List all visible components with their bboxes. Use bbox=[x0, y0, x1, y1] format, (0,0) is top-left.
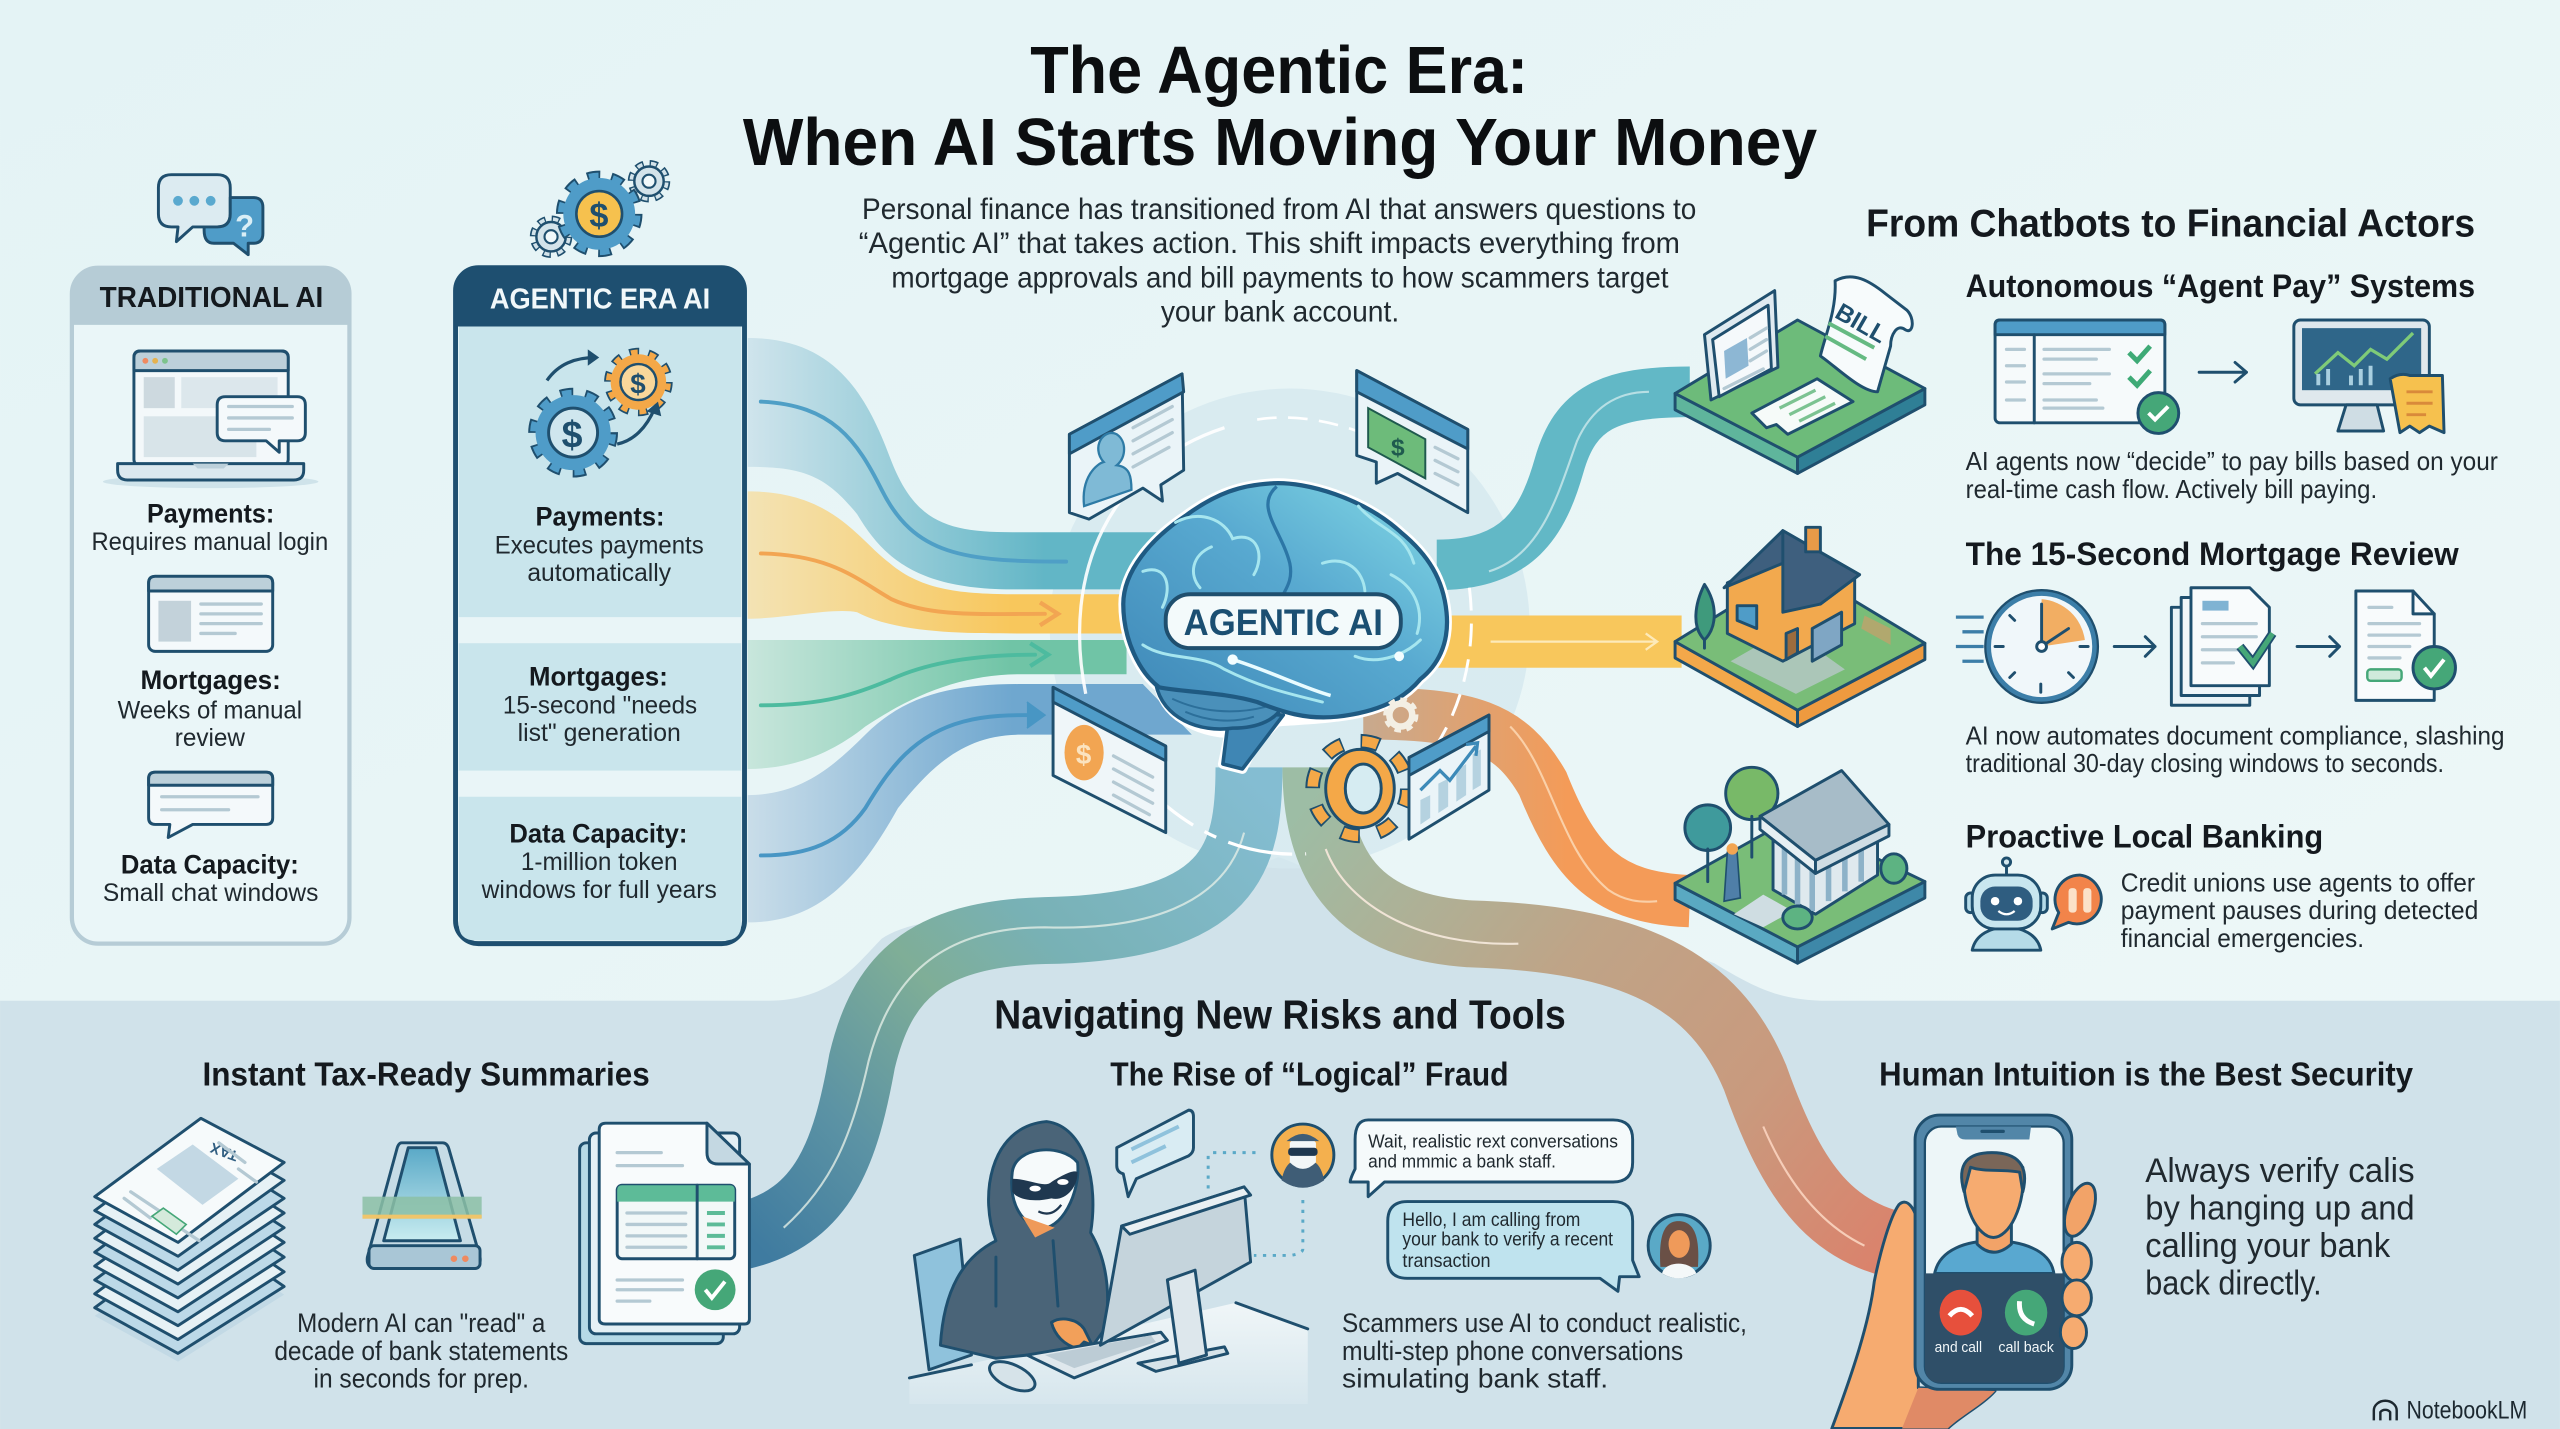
ribbon: left yellow flow bbox=[748, 491, 1135, 633]
agentic mortgages text: Mortgages: bbox=[529, 662, 668, 692]
mortgage description: traditional 30-day closing windows to seconds. bbox=[1966, 748, 2444, 778]
ribbon: right yellow to house platform bbox=[1437, 615, 1682, 668]
tax heading: Instant Tax-Ready Summaries bbox=[202, 1057, 650, 1094]
intuition description: by hanging up and bbox=[2145, 1190, 2415, 1228]
icon: statement stack bbox=[95, 1118, 284, 1362]
panel: agentic era AI bbox=[456, 268, 745, 944]
tax description: Modern AI can "read" a bbox=[297, 1308, 545, 1338]
icon: approved document bbox=[2356, 591, 2455, 700]
ribbon: right orange to bank platform bbox=[1363, 713, 1690, 902]
brain stem bbox=[1223, 712, 1283, 769]
traditional mortgages text: review bbox=[175, 724, 246, 752]
intro paragraph: mortgage approvals and bill payments to how scammers target bbox=[891, 261, 1669, 294]
agentic mortgages text bbox=[503, 662, 697, 747]
section: tax summaries bbox=[95, 1057, 749, 1394]
floating card: money window: $ bbox=[1391, 434, 1405, 461]
traditional data capacity text: Data Capacity: bbox=[121, 849, 299, 879]
AGENTIC AI label pill bbox=[1166, 594, 1401, 648]
avatar: bank caller bbox=[1648, 1215, 1710, 1278]
traditional payments text: Payments: bbox=[147, 498, 274, 528]
icon: summary document bbox=[580, 1123, 749, 1344]
agentic heading: AGENTIC ERA AI bbox=[490, 284, 710, 316]
intro paragraph bbox=[859, 193, 1696, 329]
fraud heading: The Rise of “Logical” Fraud bbox=[1110, 1057, 1509, 1094]
agent pay heading: Autonomous “Agent Pay” Systems bbox=[1966, 267, 2475, 304]
mortgage heading: The 15-Second Mortgage Review bbox=[1966, 535, 2459, 572]
title: The Agentic Era: bbox=[1030, 33, 1528, 108]
chat bubble: scammer message: Wait, realistic rext conversations bbox=[1368, 1131, 1618, 1152]
chat bubble: scammer message bbox=[1350, 1120, 1633, 1197]
icon: pause bubble bbox=[2052, 875, 2101, 929]
floating card: payment dollar: $ bbox=[1076, 739, 1092, 770]
traditional payments text bbox=[91, 498, 328, 556]
banking description: Credit unions use agents to offer bbox=[2121, 867, 2475, 897]
fraud description: simulating bank staff. bbox=[1342, 1364, 1608, 1394]
AGENTIC AI label pill: AGENTIC AI bbox=[1184, 602, 1383, 643]
scene: bank platform bbox=[1675, 767, 1925, 963]
icon: tilted chat bubble bbox=[1117, 1110, 1193, 1197]
tax description: decade of bank statements bbox=[274, 1336, 568, 1366]
section: logical fraud bbox=[909, 1057, 1747, 1404]
agent pay description bbox=[1966, 446, 2498, 504]
floating card: person profile bbox=[1069, 374, 1184, 519]
icon: statement stack: TAX bbox=[208, 1139, 241, 1163]
traditional mortgages text bbox=[118, 665, 302, 752]
floating card: payment dollar bbox=[1053, 687, 1166, 833]
ribbon: down-left to tax summaries bbox=[743, 767, 1249, 1236]
mortgage description: AI now automates document compliance, slashing bbox=[1966, 720, 2504, 750]
banking description: financial emergencies. bbox=[2121, 923, 2364, 953]
intuition description bbox=[2145, 1152, 2415, 1303]
icon: browser window bbox=[149, 576, 273, 651]
avatar: scammer bbox=[1272, 1124, 1334, 1188]
intuition description: calling your bank bbox=[2145, 1227, 2391, 1265]
agentic mortgages text: list" generation bbox=[518, 719, 681, 747]
floating card: money window bbox=[1357, 371, 1468, 513]
icon: laptop with chat bbox=[103, 351, 318, 488]
icon: clock bbox=[1956, 590, 2098, 703]
agent pay description: real-time cash flow. Actively bill paying. bbox=[1966, 474, 2377, 504]
icon: chat bubbles bbox=[158, 175, 263, 255]
fraud description bbox=[1342, 1308, 1747, 1394]
icon: dollar gears: $ bbox=[589, 197, 608, 235]
logo: NotebookLM: NotebookLM bbox=[2406, 1397, 2527, 1425]
icon: document stack bbox=[2171, 588, 2273, 705]
panel: traditional AI bbox=[72, 268, 349, 944]
scene: bill platform bbox=[1675, 277, 1925, 473]
illustration: hand holding phone bbox=[1832, 1115, 2102, 1429]
agentic data capacity text bbox=[481, 818, 717, 904]
icon: robot bbox=[1966, 858, 2047, 950]
section: agent pay bbox=[1966, 267, 2498, 504]
intro paragraph: your bank account. bbox=[1161, 296, 1399, 329]
small white gear bbox=[1385, 700, 1416, 731]
agentic payments text bbox=[495, 502, 704, 587]
arrow bbox=[2297, 637, 2340, 656]
title: When AI Starts Moving Your Money bbox=[743, 105, 1817, 180]
illustration: hooded scammer at computer bbox=[914, 1122, 1108, 1370]
arrow bbox=[2199, 362, 2246, 382]
ribbon: left blue-teal payments flow bbox=[748, 338, 1159, 589]
intuition heading: Human Intuition is the Best Security bbox=[1879, 1057, 2413, 1094]
agentic data capacity text: Data Capacity: bbox=[509, 818, 687, 848]
ribbon: left blue flow bbox=[748, 684, 1192, 922]
orange gear bbox=[1313, 741, 1407, 836]
title bbox=[743, 33, 1817, 180]
icon: scanner bbox=[362, 1143, 482, 1269]
floating card: growth chart bbox=[1409, 715, 1489, 839]
traditional payments text: Requires manual login bbox=[91, 528, 328, 556]
intro paragraph: Personal finance has transitioned from AI that answers questions to bbox=[862, 193, 1696, 226]
intuition description: back directly. bbox=[2145, 1265, 2322, 1303]
traditional data capacity text bbox=[103, 849, 318, 907]
ribbon: left green flow bbox=[748, 640, 1127, 769]
intuition description: Always verify calis bbox=[2145, 1152, 2415, 1190]
section: human intuition bbox=[1832, 1057, 2415, 1429]
illustration: hand holding phone: and call bbox=[1935, 1340, 1982, 1356]
agent pay description: AI agents now “decide” to pay bills based on your bbox=[1966, 446, 2498, 476]
ribbon: right teal to bill platform bbox=[1437, 392, 1690, 571]
lower section band bbox=[0, 857, 2560, 1429]
chat bubble: bank caller message: your bank to verify a recent bbox=[1402, 1229, 1614, 1251]
chat bubble: bank caller message: Hello, I am calling from bbox=[1402, 1209, 1580, 1231]
icon: process gears bbox=[536, 349, 666, 470]
mortgage description bbox=[1966, 720, 2504, 778]
brain: AGENTIC AI bbox=[1123, 483, 1447, 769]
heading: navigating risks: Navigating New Risks and Tools bbox=[994, 992, 1566, 1038]
heading: from chatbots: From Chatbots to Financial Actors bbox=[1866, 203, 2475, 246]
illustration: desk bbox=[909, 1303, 1308, 1404]
scene: house platform bbox=[1675, 527, 1925, 726]
tax description bbox=[274, 1308, 568, 1394]
agentic payments text: automatically bbox=[527, 559, 671, 587]
cerebellum bbox=[1156, 682, 1283, 729]
agentic data capacity text: windows for full years bbox=[481, 876, 717, 904]
scene: bill platform: BILL bbox=[1830, 299, 1891, 349]
agentic data capacity text: 1-million token bbox=[521, 848, 678, 876]
traditional mortgages text: Weeks of manual bbox=[118, 696, 302, 724]
icon: process gears: $ bbox=[630, 368, 646, 399]
illustration: computer monitor bbox=[909, 1187, 1308, 1397]
traditional heading: TRADITIONAL AI bbox=[100, 282, 323, 314]
banking description bbox=[2121, 867, 2478, 953]
fraud description: multi-step phone conversations bbox=[1342, 1336, 1683, 1366]
tax description: in seconds for prep. bbox=[314, 1364, 529, 1394]
icon: dollar gears bbox=[535, 165, 665, 253]
icon: process gears: $ bbox=[562, 413, 583, 455]
intro paragraph: “Agentic AI” that takes action. This shift impacts everything from bbox=[859, 227, 1680, 260]
white orbit ring bbox=[1080, 418, 1471, 854]
agentic payments text: Executes payments bbox=[495, 531, 704, 559]
arrow bbox=[2114, 637, 2155, 656]
banking description: payment pauses during detected bbox=[2121, 895, 2478, 925]
traditional mortgages text: Mortgages: bbox=[140, 665, 281, 695]
dotted connector bbox=[1208, 1153, 1303, 1255]
section: mortgage review bbox=[1956, 535, 2504, 778]
ribbon: down-right to human intuition bbox=[1316, 767, 1935, 1251]
chat bubble: bank caller message bbox=[1388, 1202, 1639, 1291]
icon: monitor chart bbox=[2294, 320, 2444, 433]
section: local banking bbox=[1966, 817, 2478, 953]
illustration: hand holding phone: call back bbox=[1998, 1340, 2054, 1356]
icon: chat bubbles: ? bbox=[235, 209, 254, 244]
icon: small chat window bbox=[149, 772, 273, 838]
agentic mortgages text: 15-second "needs bbox=[503, 691, 697, 719]
banking heading: Proactive Local Banking bbox=[1966, 817, 2323, 854]
chat bubble: bank caller message: transaction bbox=[1402, 1250, 1491, 1272]
icon: checklist window bbox=[1995, 320, 2179, 433]
logo: NotebookLM bbox=[2374, 1397, 2527, 1425]
halo circle behind brain bbox=[1050, 389, 1530, 869]
fraud description: Scammers use AI to conduct realistic, bbox=[1342, 1308, 1747, 1338]
chat bubble: scammer message: and mmmic a bank staff. bbox=[1368, 1150, 1556, 1171]
agentic payments text: Payments: bbox=[536, 502, 665, 532]
traditional data capacity text: Small chat windows bbox=[103, 879, 318, 907]
